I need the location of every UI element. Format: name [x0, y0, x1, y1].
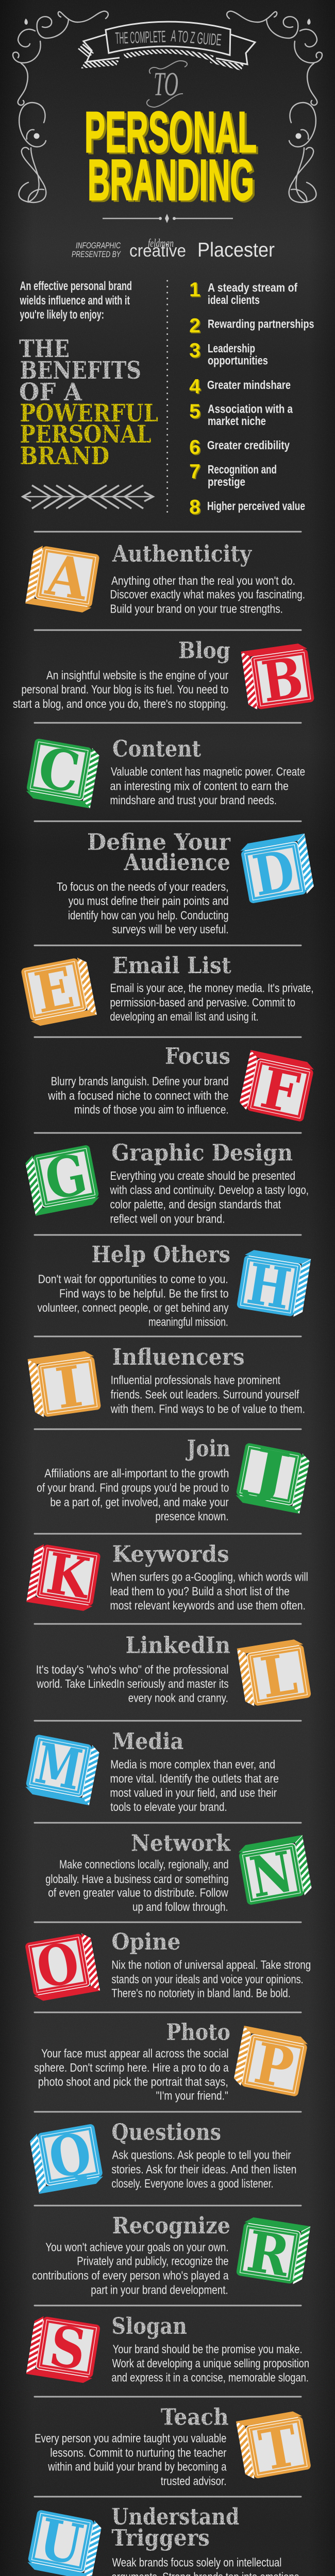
body text: minds of those you aim to influence.: [74, 1103, 229, 1116]
section: Photo: [34, 2019, 309, 2104]
title: personal branding: [85, 100, 257, 212]
body text: friends. Seek out leaders. Surround yourself: [111, 1387, 299, 1401]
body text: [110, 574, 305, 615]
block D: D: [248, 838, 299, 909]
section: Network: [45, 1830, 314, 1913]
heading: the benefits of a powerful personal brand: POWERFUL: [20, 399, 158, 428]
body text: an interesting mix of content to earn the: [110, 779, 289, 792]
body text: lessons. Commit to nurturing the teacher: [50, 2446, 227, 2459]
heading: Audience: [124, 850, 230, 876]
body text: [110, 1757, 279, 1814]
body text: globally. Have a business card or something: [45, 1872, 229, 1886]
body text: presence known.: [155, 1510, 229, 1523]
heading: Help Others: [91, 1242, 230, 1268]
body text: Build your brand on your true strengths.: [110, 602, 283, 615]
benefits list: 8: [189, 496, 200, 518]
body text: [110, 1374, 305, 1415]
section: Understand Triggers: [26, 2504, 309, 2576]
benefits list: opportunities: [208, 354, 268, 367]
body text: It's today's "who's who" of the professional: [36, 1663, 229, 1676]
body text: Everything you create should be presented: [110, 1169, 295, 1182]
benefits list: Association with a: [208, 402, 293, 416]
heading: Email List: [112, 953, 231, 979]
section: Influencers: [28, 1344, 305, 1425]
body text: [35, 2432, 227, 2487]
presented by logos: feldman: [148, 236, 174, 249]
body text: contributions of every person who's played a: [32, 2268, 229, 2282]
body text: [13, 668, 229, 710]
body text: with a focused niche to connect with the: [47, 1089, 229, 1102]
body text: color palette, and design standards that: [110, 1198, 281, 1211]
benefits list: prestige: [208, 475, 245, 488]
body text: sphere. Don't scrimp here. Hire a pro to do a: [34, 2061, 229, 2074]
heading: the benefits of a powerful personal brand: OF A: [19, 378, 82, 406]
block N: N: [246, 1839, 297, 1910]
presented by logos: [72, 214, 275, 261]
intro text: wields influence and with it: [20, 294, 130, 308]
body text: Media is more complex than ever, and: [110, 1757, 275, 1771]
body text: be a part of, get involved, and make your: [50, 1495, 229, 1509]
body text: start a blog, and once you do, there's no stopping.: [13, 697, 228, 710]
presented by logos: creative: [129, 241, 186, 261]
body text: identify how can you help. Conducting: [68, 908, 229, 922]
body text: most valued in your field, and use their: [110, 1786, 277, 1800]
body text: more vital. Identify the outlets that are: [110, 1772, 279, 1785]
body text: [32, 2240, 229, 2296]
block P: P: [249, 2031, 298, 2102]
body text: Weak brands focus solely on intellectual: [112, 2556, 281, 2569]
ornamental flourish left: [13, 11, 108, 202]
block M: M: [31, 1731, 87, 1803]
body text: Blurry brands languish. Define your brand: [51, 1075, 229, 1088]
body text: [37, 1467, 229, 1523]
heading: [87, 829, 231, 876]
intro text: An effective personal brand: [20, 279, 132, 293]
banner: the complete a to z guide: [78, 22, 255, 71]
body text: [57, 880, 229, 936]
body text: To focus on the needs of your readers,: [57, 880, 229, 893]
body text: with them. Find ways to be of value to them.: [110, 1402, 305, 1415]
body text: [111, 2556, 309, 2576]
body text: stories. Ask for their ideas. And then listen: [111, 2162, 296, 2176]
heading: the benefits of a powerful personal brand: BENEFITS: [20, 357, 141, 385]
benefits list: 7: [189, 461, 200, 483]
heading: Photo: [166, 2019, 230, 2045]
section: Questions: [28, 2119, 296, 2194]
heading: Questions: [111, 2119, 221, 2145]
block I: [28, 1350, 102, 1425]
block S: [26, 2310, 102, 2385]
block P: [231, 2026, 309, 2104]
body text: developing an email list and using it.: [110, 1010, 259, 1023]
body text: [110, 1169, 309, 1225]
section: Slogan: [26, 2310, 309, 2385]
block S: S: [45, 2313, 90, 2383]
body text: Every person you admire taught you valuable: [35, 2432, 226, 2445]
section: Recognize: [32, 2213, 310, 2296]
heading: the benefits of a powerful personal brand: PERSONAL: [20, 420, 152, 449]
heading: Blog: [178, 637, 230, 664]
body text: every nook and cranny.: [128, 1691, 228, 1704]
body text: Affiliations are all-important to the growth: [44, 1467, 229, 1480]
body text: of your brand. Find groups you'd be proud to: [37, 1481, 229, 1495]
body text: part in your brand development.: [91, 2283, 228, 2296]
body text: There's no notoriety in bland land. Be bold.: [111, 1987, 291, 2000]
benefits list: Recognition and: [208, 463, 277, 476]
body text: Influential professionals have prominent: [111, 1374, 280, 1387]
body text: [111, 2148, 296, 2190]
block L: [237, 1638, 312, 1714]
body text: within and build your brand by becoming a: [47, 2460, 227, 2473]
heading: Graphic Design: [111, 1140, 293, 1166]
benefits list: 4: [189, 376, 200, 398]
block J: J: [241, 1435, 295, 1507]
body text: meaningful mission.: [148, 1315, 228, 1328]
body text: of even greater value to distribute. Follow: [48, 1886, 228, 1900]
dotted divider: [166, 281, 168, 512]
icon: crossed arrows: [23, 485, 153, 509]
section: Keywords: [26, 1538, 308, 1613]
block E: [20, 952, 97, 1028]
benefits list: 6: [189, 436, 200, 459]
block E: E: [30, 955, 79, 1026]
heading: Define Your: [87, 829, 231, 855]
body text: Don't wait for opportunities to come to you.: [38, 1273, 228, 1286]
benefits list: Leadership: [208, 342, 255, 355]
body text: [111, 2342, 309, 2384]
body text: world. Take LinkedIn seriously and master its: [36, 1677, 229, 1690]
heading: the benefits of a powerful personal brand: BRAND: [20, 442, 109, 470]
body text: permission-based and pervasive. Commit to: [110, 995, 295, 1009]
body text: [110, 765, 305, 807]
block F: [237, 1050, 315, 1129]
block J: [234, 1434, 312, 1514]
benefits list: Higher perceived value: [207, 499, 305, 513]
heading: LinkedIn: [125, 1632, 230, 1658]
intro text: [20, 279, 132, 322]
body text: Make connections locally, regionally, and: [59, 1858, 229, 1871]
body text: Ask questions. Ask people to tell you their: [112, 2148, 291, 2162]
heading: the benefits of a powerful personal brand: [19, 335, 158, 470]
block K: K: [43, 1541, 95, 1612]
block Q: Q: [44, 2121, 96, 2192]
body text: personal brand. Your blog is its fuel. You need to: [22, 683, 229, 696]
body text: reflect well on your brand.: [110, 1212, 225, 1225]
body text: [111, 1958, 311, 2000]
body text: mindshare and trust your brand needs.: [110, 793, 277, 807]
section: Focus: [47, 1043, 315, 1129]
body text: photo shoot and pick the portrait that says,: [38, 2075, 228, 2089]
body text: Your face must appear all across the social: [41, 2046, 229, 2060]
body text: [38, 1273, 229, 1328]
heading: Slogan: [111, 2313, 187, 2340]
script word: to: TO: [154, 65, 178, 103]
benefits list: [189, 279, 314, 518]
body text: An insightful website is the engine of your: [46, 668, 228, 682]
block C: [25, 734, 101, 809]
block B: B: [258, 645, 307, 715]
benefits list: A steady stream of: [208, 281, 297, 294]
benefits list: ideal clients: [208, 293, 260, 307]
block O: O: [32, 1930, 84, 2001]
heading: Recognize: [112, 2213, 230, 2239]
body text: Find ways to be helpful. Be the first to: [59, 1286, 229, 1300]
body text: [34, 2046, 229, 2103]
banner: the complete a to z guide: THE COMPLETE: [115, 27, 166, 47]
section: Opine: [24, 1927, 311, 2003]
section: Media: [24, 1728, 279, 1814]
heading: Influencers: [112, 1344, 245, 1370]
heading: Join: [185, 1436, 230, 1462]
section: Content: [25, 734, 305, 809]
block L: L: [257, 1641, 301, 1711]
block G: G: [40, 1142, 92, 1213]
body text: lead them to you? Build a short list of the: [110, 1585, 290, 1598]
body text: [110, 981, 314, 1023]
presented by logos: PRESENTED BY: [72, 249, 121, 259]
body text: surveys will be very useful.: [112, 923, 229, 936]
benefits list: market niche: [208, 414, 266, 428]
heading: Network: [131, 1830, 231, 1856]
heading: [111, 2504, 239, 2551]
body text: [45, 1858, 229, 1913]
heading: Media: [112, 1728, 183, 1755]
body text: [110, 1570, 308, 1612]
benefits list: 1: [189, 279, 200, 301]
heading: Triggers: [111, 2525, 210, 2551]
benefits list: 3: [189, 340, 200, 362]
body text: Privately and publicly, recognize the: [77, 2255, 229, 2268]
body text: tools to elevate your brand.: [110, 1800, 227, 1814]
benefits list: 2: [189, 315, 200, 337]
section: Email List: [20, 952, 314, 1028]
heading: Teach: [161, 2404, 229, 2431]
body text: up and follow through.: [132, 1900, 228, 1913]
intro text: you're likely to enjoy:: [20, 308, 104, 322]
body text: You won't achieve your goals on your own.: [45, 2240, 229, 2253]
block T: T: [255, 2413, 303, 2484]
body text: trusted advisor.: [161, 2474, 227, 2487]
presented by logos: INFOGRAPHIC: [76, 241, 121, 250]
presented by logos: Placester: [197, 239, 275, 261]
section: Join: [37, 1434, 312, 1523]
heading: Opine: [111, 1929, 180, 1955]
heading: Focus: [165, 1043, 230, 1070]
body text: volunteer, connect people, or get behind any: [38, 1301, 229, 1314]
benefits list: Greater credibility: [207, 438, 290, 452]
body text: Anything other than the real you won't do.: [111, 574, 295, 587]
section: Authenticity: [25, 540, 305, 615]
body text: closely. Everyone loves a good listener.: [111, 2177, 274, 2190]
block F: F: [256, 1056, 304, 1126]
section: Define Your Audience: [57, 829, 316, 936]
ornamental flourish right: [227, 11, 322, 202]
section: Help Others: [38, 1242, 311, 1328]
benefits list: Greater mindshare: [207, 378, 291, 392]
heading: Understand: [111, 2504, 239, 2530]
benefits list: 5: [189, 400, 200, 422]
block R: [235, 2216, 310, 2292]
section: Teach: [35, 2404, 312, 2487]
body text: [36, 1663, 229, 1704]
section: Graphic Design: [23, 1140, 309, 1225]
block C: C: [34, 735, 85, 806]
section: Blog: [13, 637, 315, 718]
heading: Content: [112, 736, 202, 762]
block R: R: [243, 2219, 294, 2290]
heading: the benefits of a powerful personal brand: THE: [19, 335, 70, 363]
block T: [236, 2410, 312, 2487]
block I: I: [52, 1354, 87, 1421]
section: LinkedIn: [36, 1632, 312, 1714]
block A: [25, 540, 100, 614]
block A: A: [42, 543, 93, 613]
heading: Authenticity: [112, 541, 252, 567]
body text: [47, 1075, 229, 1116]
block H: H: [243, 1251, 295, 1322]
body text: "I'm your friend.": [156, 2089, 228, 2103]
body text: you must define their pain points and: [69, 894, 229, 908]
script word: to: [147, 61, 187, 107]
heading: Keywords: [112, 1541, 229, 1568]
banner: the complete a to z guide: A TO Z GUIDE: [170, 26, 222, 49]
